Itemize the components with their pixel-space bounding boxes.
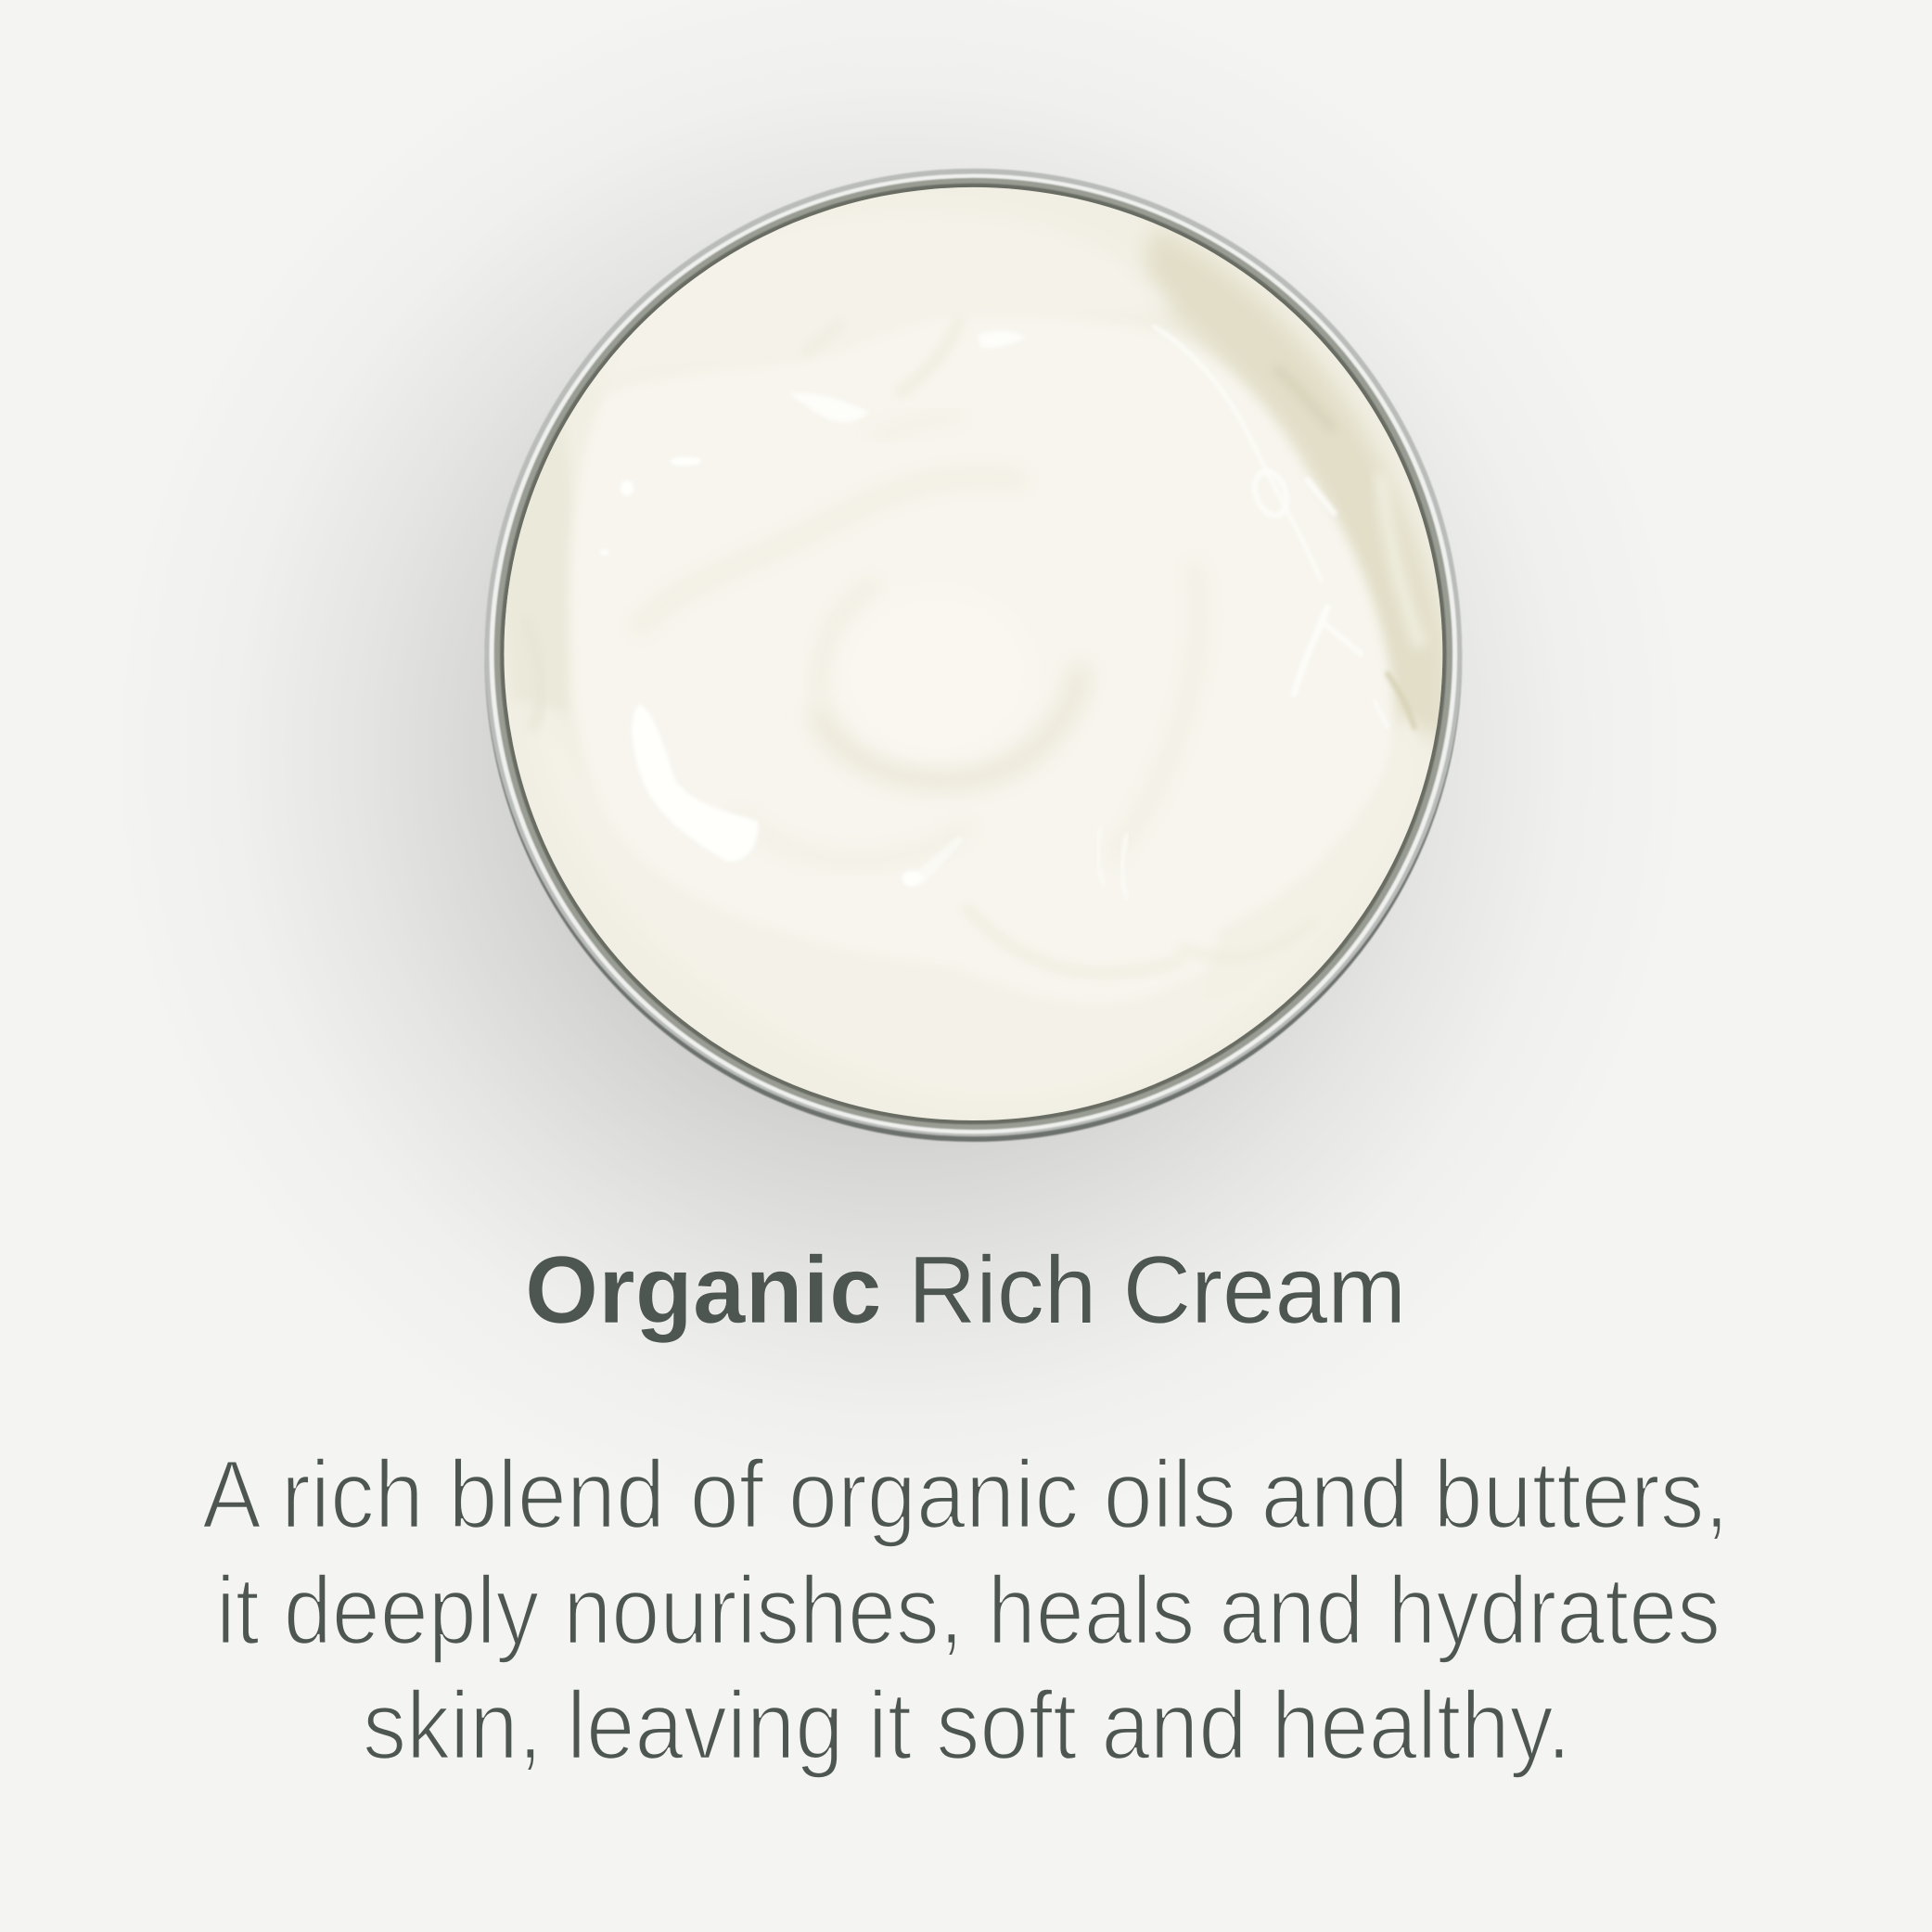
soft drop shadow under tin — [102, 0, 1697, 1549]
main cream mound — [569, 315, 1395, 1002]
metal rim — [485, 169, 1462, 1142]
central swirl bright — [839, 590, 1033, 758]
shadow marks on wall — [1279, 371, 1330, 425]
right-side lobe — [1402, 717, 1410, 733]
cream tin seen from above — [485, 169, 1462, 1142]
cream body — [505, 202, 1443, 1001]
tin interior — [504, 187, 1442, 1120]
line 3: skin, leaving it soft and healthy. — [363, 1672, 1571, 1780]
soft folds — [525, 320, 1414, 973]
line 1: A rich blend of organic oils and butters, — [202, 1441, 1729, 1549]
gloss highlights — [599, 331, 1026, 887]
top cream lobe — [593, 206, 1169, 393]
line 2: it deeply nourishes, heals and hydrates — [216, 1557, 1721, 1665]
description text — [202, 1441, 1729, 1780]
inner wall, left — [505, 423, 567, 704]
title: Organic Rich Cream — [525, 1236, 1406, 1343]
lower outer cream — [532, 708, 1417, 1102]
shaded inner wall, upper right — [1141, 226, 1448, 741]
